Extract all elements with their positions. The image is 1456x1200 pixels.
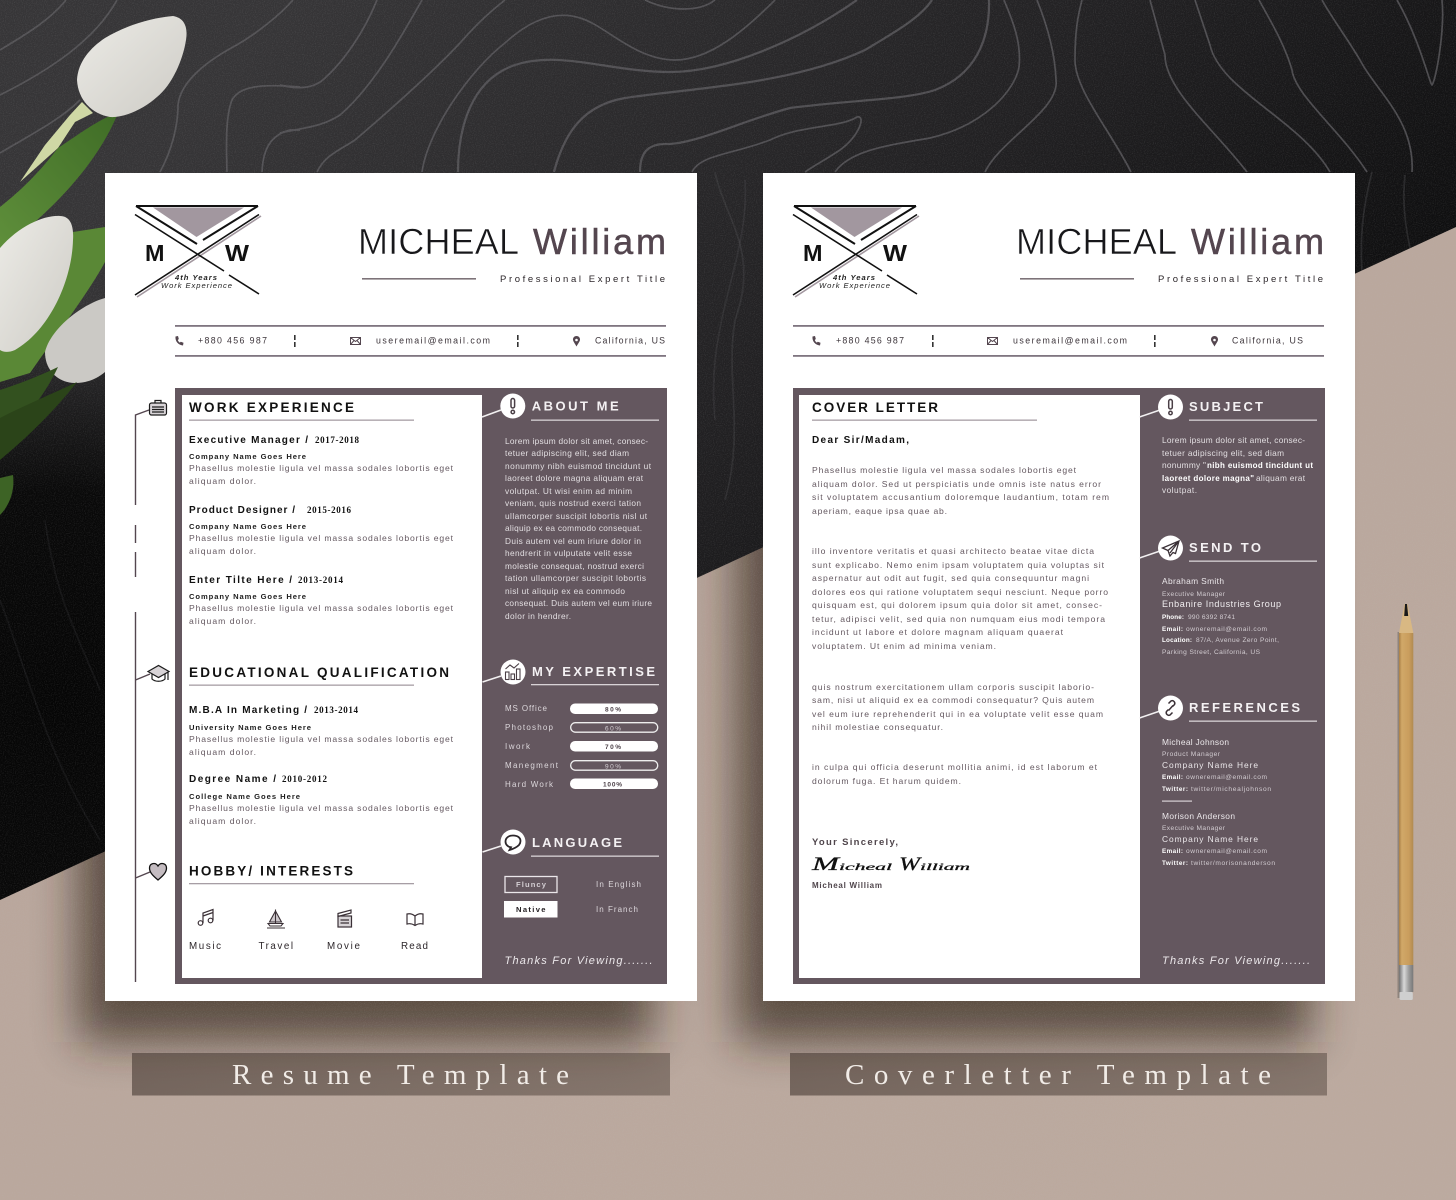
icon: phone	[812, 336, 820, 346]
section: language	[482, 830, 659, 918]
section: send to: Enbanire Industries Group	[1162, 599, 1281, 609]
section: about me: nisl ut aliquip ex ea commodo	[505, 586, 625, 596]
pencil	[1398, 604, 1413, 1000]
flowers: white tulips and leaves	[0, 16, 187, 515]
section: educational qualification: University Name Goes Here	[189, 723, 311, 732]
section: cover letter body: vel eum iure reprehenderit qui in ea voluptate velit esse quam	[812, 709, 1103, 719]
signature: M	[810, 854, 841, 875]
icon: exclamation mark	[511, 398, 515, 414]
section: references: Twitter:	[1162, 860, 1188, 867]
section: cover letter body: aperiam, eaque ipsa quae ab.	[812, 506, 947, 516]
section: my expertise skill bars: 90%	[605, 763, 621, 770]
section: educational qualification: Phasellus molestie ligula vel massa sodales lobortis eget	[189, 734, 454, 744]
section: references: Company Name Here	[1162, 760, 1258, 770]
section: my expertise skill bars: Photoshop	[505, 723, 554, 732]
icon: exclamation mark	[1169, 400, 1172, 415]
section: about me: molestie consequat, nostrud exerci	[505, 561, 644, 571]
section: send to: 87/A, Avenue Zero Point,	[1196, 637, 1279, 644]
contact bar: California, US	[595, 336, 665, 346]
section: work experience	[189, 400, 454, 626]
section: cover letter body: voluptatem. Ut enim ad minima veniam.	[812, 641, 996, 651]
section: my expertise skill bars	[482, 660, 659, 789]
icon: heart	[150, 864, 166, 880]
section: my expertise skill bars: Hard Work	[505, 780, 554, 789]
section: language: Fluncy	[516, 880, 547, 889]
signature	[810, 854, 971, 875]
logo: MW monogram	[793, 206, 919, 297]
name heading	[358, 221, 666, 262]
section: references: twitter/morisonanderson	[1191, 860, 1275, 867]
section: work experience: Company Name Goes Here	[189, 522, 306, 531]
section: my expertise skill bars: 80%	[605, 706, 621, 714]
section: my expertise skill bars: Iwork	[505, 742, 531, 751]
section: work experience: WORK EXPERIENCE	[189, 400, 354, 415]
section: cover letter body: Dear Sir/Madam,	[812, 435, 909, 446]
icon: briefcase	[150, 400, 166, 415]
section: my expertise skill bars: 60%	[605, 725, 621, 732]
icon: phone	[175, 336, 184, 346]
section: about me: ABOUT ME	[532, 398, 619, 414]
section: my expertise skill bars: 100%	[603, 782, 622, 788]
logo: MW monogram: W	[883, 240, 907, 266]
section: cover letter body: dolorum fuga. Et harum quidem.	[812, 776, 961, 786]
job title: Professional Expert Title	[500, 274, 665, 285]
section: about me: volutpat. Ut wisi enim ad minim	[505, 486, 632, 496]
section: cover letter body: sam, nisi ut aliquid ex ea commodi consequatur? Quis autem	[812, 695, 1094, 705]
section: about me: tation ullamcorper suscipit lobortis	[505, 573, 646, 583]
section: work experience: Phasellus molestie ligula vel massa sodales lobortis eget	[189, 603, 454, 613]
sheet: cover letter	[763, 173, 1355, 1001]
timeline with section icons	[136, 400, 169, 982]
logo: MW monogram: Work Experience	[161, 281, 232, 290]
section: send to: Parking Street, California, US	[1162, 649, 1261, 656]
section: cover letter body: tetur, adipisci velit, sed quia non numquam eius modi tempora	[812, 614, 1105, 624]
section: subject	[1140, 394, 1317, 495]
section: references: REFERENCES	[1189, 700, 1300, 715]
section: language: Native	[516, 905, 546, 914]
section: references: Email:	[1162, 848, 1183, 855]
section: work experience: aliquam dolor.	[189, 546, 256, 556]
icon: bar chart	[506, 664, 520, 680]
section: cover letter body: Micheal William	[812, 881, 882, 890]
section: educational qualification	[189, 665, 454, 826]
section: send to: SEND TO	[1189, 540, 1261, 555]
section: subject: aliquam erat	[1256, 473, 1306, 483]
section: my expertise skill bars: 70%	[605, 744, 621, 751]
section: work experience: Product Designer /	[189, 505, 295, 516]
name heading: MICHEAL	[358, 221, 519, 262]
section: work experience: aliquam dolor.	[189, 476, 256, 486]
background: topographic contour lines	[0, 0, 1443, 840]
icon: film clapperboard	[338, 910, 352, 927]
panel: dark frame with right column	[793, 388, 1325, 984]
section: send to: 990 6392 8741	[1188, 614, 1235, 621]
section: about me: Duis autem vel eum iriure dolor in	[505, 536, 641, 546]
job title: Professional Expert Title	[1158, 274, 1323, 285]
section: educational qualification: Phasellus molestie ligula vel massa sodales lobortis eget	[189, 803, 454, 813]
section: send to: owneremail@email.com	[1186, 626, 1268, 633]
section: cover letter body: quis nostrum exercitationem ullam corporis suscipit laborio-	[812, 682, 1094, 692]
section: references: owneremail@email.com	[1186, 848, 1268, 855]
section: references: Executive Manager	[1162, 825, 1226, 832]
section: cover letter body: in culpa qui officia deserunt mollitia animi, id est laborum et	[812, 762, 1098, 772]
section: subject: SUBJECT	[1189, 399, 1263, 414]
signature: illiam	[920, 862, 971, 872]
logo: MW monogram: M	[145, 240, 164, 266]
section: work experience: Enter Tilte Here /	[189, 575, 292, 586]
section: educational qualification: EDUCATIONAL QUALIFICATION	[189, 665, 449, 680]
icon: graduation cap	[148, 666, 169, 681]
name heading	[1016, 221, 1324, 262]
name heading: MICHEAL	[1016, 221, 1177, 262]
section: educational qualification: aliquam dolor.	[189, 747, 256, 757]
section: cover letter body	[810, 400, 1109, 890]
panel: white letter column	[799, 395, 1140, 978]
panel: dark frame with right column	[175, 388, 667, 984]
section: about me: veniam, quis nostrud exerci tation	[505, 498, 641, 508]
logo: MW monogram: 4th Years	[832, 273, 875, 282]
section: subject: Lorem ipsum dolor sit amet, consec-	[1162, 435, 1305, 445]
section: work experience: 2015-2016	[307, 505, 352, 515]
contact bar: +880 456 987	[198, 336, 267, 346]
contact bar	[793, 325, 1324, 357]
logo: MW monogram: M	[803, 240, 822, 266]
contact bar: useremail@email.com	[376, 336, 490, 346]
section: language: In English	[596, 880, 641, 889]
section: language: In Franch	[596, 905, 638, 914]
section: work experience: 2013-2014	[298, 575, 344, 585]
panel: white content column	[182, 395, 482, 978]
icon: chain link	[1166, 701, 1175, 715]
icon: paper plane	[1162, 541, 1179, 556]
icon: sailboat	[267, 910, 285, 928]
section: subject: nonummy "	[1162, 460, 1206, 470]
section: hobby and interests: Movie	[327, 941, 361, 952]
section: subject: volutpat.	[1162, 485, 1197, 495]
icon: music note	[198, 910, 213, 925]
section: work experience: Company Name Goes Here	[189, 452, 306, 461]
section: subject: tetuer adipiscing elit, sed diam	[1162, 448, 1284, 458]
icon: speech bubble	[506, 836, 520, 850]
caption: coverletter template: Coverletter Template	[845, 1059, 1271, 1091]
section: references: Company Name Here	[1162, 834, 1258, 844]
caption: resume template	[132, 1053, 670, 1096]
caption: resume template: Resume Template	[232, 1059, 569, 1091]
logo: MW monogram: 4th Years	[174, 273, 217, 282]
section: send to: Location:	[1162, 637, 1192, 644]
section: cover letter body: Your Sincerely,	[812, 837, 898, 848]
section: cover letter body: illo inventore veritatis et quasi architecto beatae vitae dicta	[812, 546, 1094, 556]
section: send to	[1140, 536, 1317, 656]
section: about me: laoreet dolore magna aliquam erat	[505, 473, 644, 483]
section: references: owneremail@email.com	[1186, 774, 1268, 781]
section: educational qualification: 2010-2012	[282, 774, 328, 784]
section: about me: aliquip ex ea commodo consequat.	[505, 523, 642, 533]
section: send to: Phone:	[1162, 614, 1184, 621]
section: educational qualification: Degree Name /	[189, 774, 276, 785]
section: about me: Lorem ipsum dolor sit amet, consec-	[505, 436, 648, 446]
sheet: resume	[105, 173, 697, 1001]
section: educational qualification: M.B.A In Marketing /	[189, 705, 307, 716]
signature: icheal	[839, 862, 893, 872]
section: cover letter body: incidunt ut labore et dolore magnam aliquam quaerat	[812, 627, 1064, 637]
section: cover letter body: sit voluptatem accusantium doloremque laudantium, totam rem	[812, 492, 1109, 502]
section: work experience: Executive Manager /	[189, 435, 308, 446]
section: language: LANGUAGE	[532, 835, 622, 850]
section: cover letter body: aliquam dolor. Sed ut perspiciatis unde omnis iste natus error	[812, 479, 1101, 489]
section: references: twitter/michealjohnson	[1191, 786, 1271, 793]
section: educational qualification: College Name Goes Here	[189, 792, 300, 801]
section: about me: tetuer adipiscing elit, sed diam	[505, 448, 629, 458]
contact bar	[175, 325, 666, 357]
section: hobby and interests	[189, 864, 428, 952]
name heading: William	[1191, 221, 1324, 262]
section: cover letter body: aspernatur aut odit aut fugit, sed quia consequuntur magni	[812, 573, 1089, 583]
section: references	[1140, 696, 1317, 867]
section: work experience: Company Name Goes Here	[189, 592, 306, 601]
section: references: Email:	[1162, 774, 1183, 781]
logo: MW monogram	[135, 206, 261, 297]
section: cover letter body: nihil molestiae consequatur.	[812, 722, 943, 732]
section: about me: hendrerit in vulputate velit esse	[505, 548, 632, 558]
name heading: William	[533, 221, 666, 262]
closing note: Thanks For Viewing.......	[504, 955, 652, 967]
section: hobby and interests: Travel	[258, 941, 293, 952]
icon: location pin	[1211, 336, 1218, 346]
section: subject: nibh euismod tincidunt ut	[1207, 461, 1313, 470]
signature: W	[899, 854, 923, 875]
section: work experience: Phasellus molestie ligula vel massa sodales lobortis eget	[189, 533, 454, 543]
section: about me: consequat. Duis autem vel eum iriure	[505, 598, 652, 608]
section: subject: laoreet dolore magna"	[1162, 474, 1254, 483]
section: hobby and interests: Music	[189, 941, 221, 952]
section: references: Micheal Johnson	[1162, 737, 1229, 747]
logo: MW monogram: W	[225, 240, 249, 266]
section: cover letter body: dolores eos qui ratione voluptatem sequi nesciunt. Neque porro	[812, 587, 1108, 597]
section: hobby and interests: HOBBY/ INTERESTS	[189, 864, 353, 878]
section: work experience: 2017-2018	[315, 435, 360, 445]
contact bar: +880 456 987	[836, 336, 904, 346]
section: send to: Email:	[1162, 626, 1183, 633]
section: send to: Executive Manager	[1162, 591, 1226, 598]
section: references: Twitter:	[1162, 786, 1188, 793]
section: about me	[482, 394, 659, 621]
section: hobby and interests: Read	[401, 941, 428, 952]
section: work experience: Phasellus molestie ligula vel massa sodales lobortis eget	[189, 463, 454, 473]
section: educational qualification: aliquam dolor.	[189, 816, 256, 826]
section: educational qualification: 2013-2014	[314, 705, 358, 715]
section: about me: nonummy nibh euismod tincidunt ut	[505, 461, 652, 471]
section: cover letter body: COVER LETTER	[812, 400, 938, 415]
caption: coverletter template	[790, 1053, 1327, 1096]
section: about me: dolor in hendrer.	[505, 611, 571, 621]
section: references: Morison Anderson	[1162, 811, 1235, 821]
closing note: Thanks For Viewing.......	[1162, 955, 1310, 967]
section: my expertise skill bars: Manegment	[505, 761, 559, 770]
section: my expertise skill bars: MS Office	[505, 704, 548, 713]
icon: envelope	[350, 338, 360, 344]
section: cover letter body: quisquam est, qui dolorem ipsum quia dolor sit amet, consec-	[812, 600, 1102, 610]
section: about me: ullamcorper suscipit lobortis nisl ut	[505, 511, 648, 521]
section: my expertise skill bars: MY EXPERTISE	[532, 664, 655, 679]
section: references: Product Manager	[1162, 751, 1221, 758]
icon: open book	[407, 914, 423, 926]
contact bar: California, US	[1232, 336, 1303, 346]
contact bar: useremail@email.com	[1013, 336, 1127, 346]
section: cover letter body: sunt explicabo. Nemo enim ipsam voluptatem quia voluptas sit	[812, 560, 1105, 570]
logo: MW monogram: Work Experience	[819, 281, 890, 290]
section: send to: Abraham Smith	[1162, 576, 1224, 586]
icon: location pin	[573, 336, 580, 346]
shadows beneath the two sheets	[46, 548, 1343, 1074]
section: cover letter body: Phasellus molestie ligula vel massa sodales lobortis eget	[812, 465, 1077, 475]
icon: envelope	[988, 338, 998, 344]
section: work experience: aliquam dolor.	[189, 616, 256, 626]
